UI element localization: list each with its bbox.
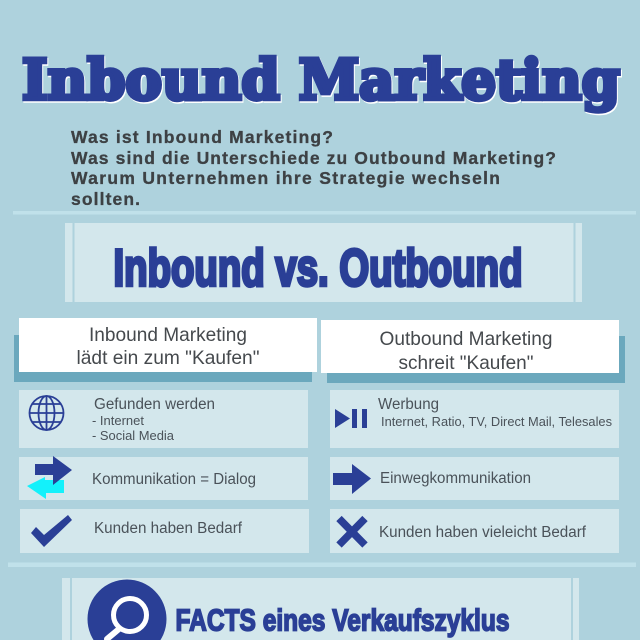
panel: outbound header: schreit "Kaufen": [398, 352, 534, 374]
row: werbung: Werbung: [378, 396, 439, 413]
heading: facts: FACTS eines Verkaufszyklus: [176, 602, 510, 638]
icon: magnifier: [88, 580, 166, 640]
icon: right arrow: [333, 464, 371, 494]
icon: blue arrow: [35, 456, 72, 485]
row: kunden haben bedarf: [20, 509, 309, 553]
icon: play pause: [335, 409, 367, 428]
intro questions: Was sind die Unterschiede zu Outbound Marketing?: [71, 148, 556, 168]
row: gefunden werden: - Social Media: [92, 428, 175, 443]
row: gefunden werden: Gefunden werden: [94, 396, 215, 413]
intro questions: [71, 127, 556, 209]
row: vielleicht bedarf: Kunden haben vieleicht Bedarf: [379, 524, 587, 541]
row: gefunden werden: [19, 390, 308, 448]
row: kunden haben bedarf: Kunden haben Bedarf: [94, 520, 243, 537]
panel: outbound header: Outbound Marketing: [380, 328, 552, 350]
panel: vs heading: [65, 223, 582, 302]
title: Inbound Marketing: [22, 47, 620, 112]
row: gefunden werden: - Internet: [92, 413, 144, 428]
icon: globe: [30, 396, 64, 430]
intro questions: sollten.: [71, 189, 140, 209]
icon: cyan arrow: [27, 477, 64, 499]
row: vielleicht bedarf: [330, 509, 619, 553]
intro questions: Was ist Inbound Marketing?: [71, 127, 333, 147]
row: einwegkommunikation: [330, 457, 619, 500]
panel: inbound header: lädt ein zum "Kaufen": [76, 347, 260, 369]
panel: facts: [62, 578, 579, 640]
panel: inbound header: [14, 318, 317, 382]
intro questions: Warum Unternehmen ihre Strategie wechseln: [71, 168, 500, 188]
row: kommunikation: [19, 456, 308, 500]
title: Inbound Marketing: [23, 48, 621, 114]
panel: outbound header: [321, 320, 625, 383]
row: kommunikation: Kommunikation = Dialog: [92, 471, 256, 488]
row: werbung: [330, 390, 619, 448]
row: einwegkommunikation: Einwegkommunikation: [380, 470, 531, 487]
panel: inbound header: Inbound Marketing: [89, 324, 247, 346]
icon: cross: [339, 518, 365, 545]
row: werbung: Internet, Ratio, TV, Direct Mail, Telesales: [381, 414, 612, 429]
icon: check mark: [31, 515, 72, 547]
